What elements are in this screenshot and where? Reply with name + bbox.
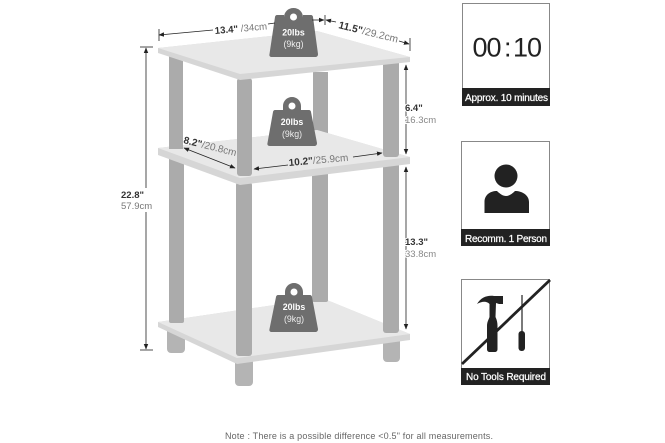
dimension: lower shelf gap: 13.3" [405,237,428,248]
weight icon: bottom shelf: (9kg) [284,314,304,324]
prohibition slash [462,280,550,364]
bottom shelf [158,298,410,364]
digital clock: 00:10 [472,32,542,62]
dimension: total height: 22.8" [121,190,144,201]
weight icon: middle shelf [267,97,317,146]
dimension: lower shelf gap [405,167,436,329]
footnote: Note : There is a possible difference <0.5" for all measurements. [225,431,493,441]
front legs, lower section [169,155,399,356]
dimension: total height: 57.9cm [121,201,152,212]
panel: no tools [461,280,550,385]
weight icon: top shelf [269,8,318,57]
dimension: middle shelf depth: 8.2"/20.8cm [182,135,238,159]
dimension: top depth [325,15,410,51]
panel: assembly time [462,4,550,106]
dimension: upper shelf gap: 6.4" [405,103,423,114]
weight icon: middle shelf: (9kg) [282,129,302,139]
back leg, upper section [313,72,328,134]
dimension: upper shelf gap [405,65,436,154]
dimension: total height [121,47,153,350]
front legs, upper section [169,56,399,176]
panel: assembly time: Approx. 10 minutes [465,93,548,104]
panel: people required: Recomm. 1 Person [465,234,547,245]
top shelf [158,31,410,80]
dimension: middle shelf width: 10.2"/25.9cm [288,153,349,169]
back legs, lower section [167,172,400,386]
weight icon: middle shelf: 20lbs [281,117,303,127]
dimension: top depth: 11.5"/29.2cm [337,20,399,46]
side table illustration [158,31,410,386]
dimension: upper shelf gap: 16.3cm [405,115,436,126]
dimension: middle shelf width [254,153,382,169]
panel: people required [461,142,550,246]
panel: no tools: No Tools Required [466,372,546,383]
weight icon: bottom shelf [269,283,318,332]
dimension: lower shelf gap: 33.8cm [405,249,436,260]
middle shelf [158,130,410,185]
weight icon: top shelf: (9kg) [283,39,304,49]
dimension: top width [159,20,324,41]
weight icon: top shelf: 20lbs [282,28,305,38]
icon: screwdriver [518,295,525,351]
icon: person [484,164,529,213]
dimension: top width: 13.4" /34cm [214,21,268,37]
weight icon: bottom shelf: 20lbs [283,302,305,312]
icon: hammer [477,296,503,352]
